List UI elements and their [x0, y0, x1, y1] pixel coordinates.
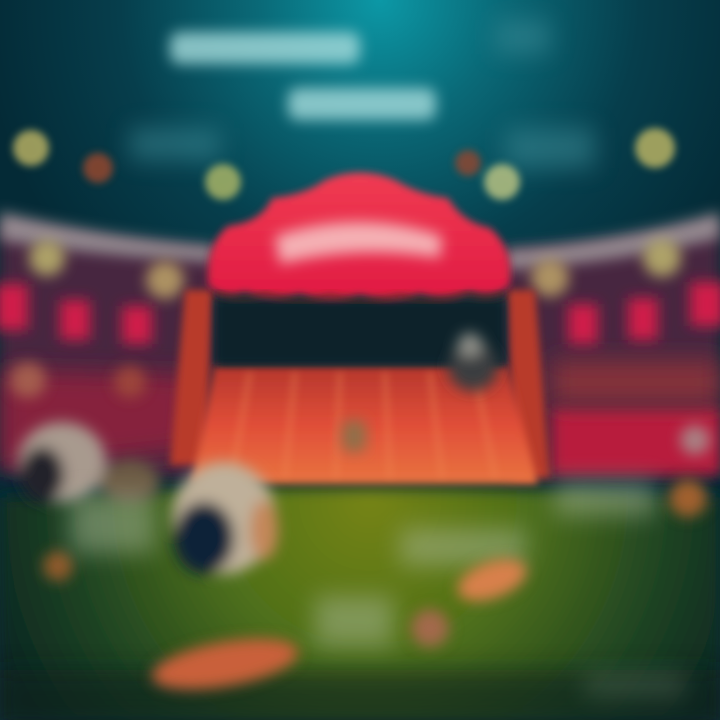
- dark opening: [216, 300, 504, 364]
- stage floor: [192, 366, 538, 484]
- red roof: [208, 172, 511, 299]
- small stage figure: [342, 420, 366, 452]
- faint sky labels: [130, 20, 595, 168]
- stadium stands left: [0, 212, 215, 480]
- bottom vignette: [0, 670, 720, 720]
- stadium stands right: [505, 212, 720, 480]
- blurred title: [170, 32, 436, 120]
- small ball far left: [18, 422, 160, 581]
- orange accents on field: [148, 479, 707, 699]
- large ball left: [172, 462, 278, 574]
- field labels: [70, 480, 685, 698]
- glowing lights in the sky: [13, 128, 675, 200]
- tent posts: [170, 290, 550, 478]
- dark scallop edge of roof: [215, 292, 505, 301]
- grass field: [0, 488, 720, 720]
- tent: [170, 172, 550, 484]
- figure in opening: [448, 333, 498, 391]
- roof banner: [275, 222, 442, 264]
